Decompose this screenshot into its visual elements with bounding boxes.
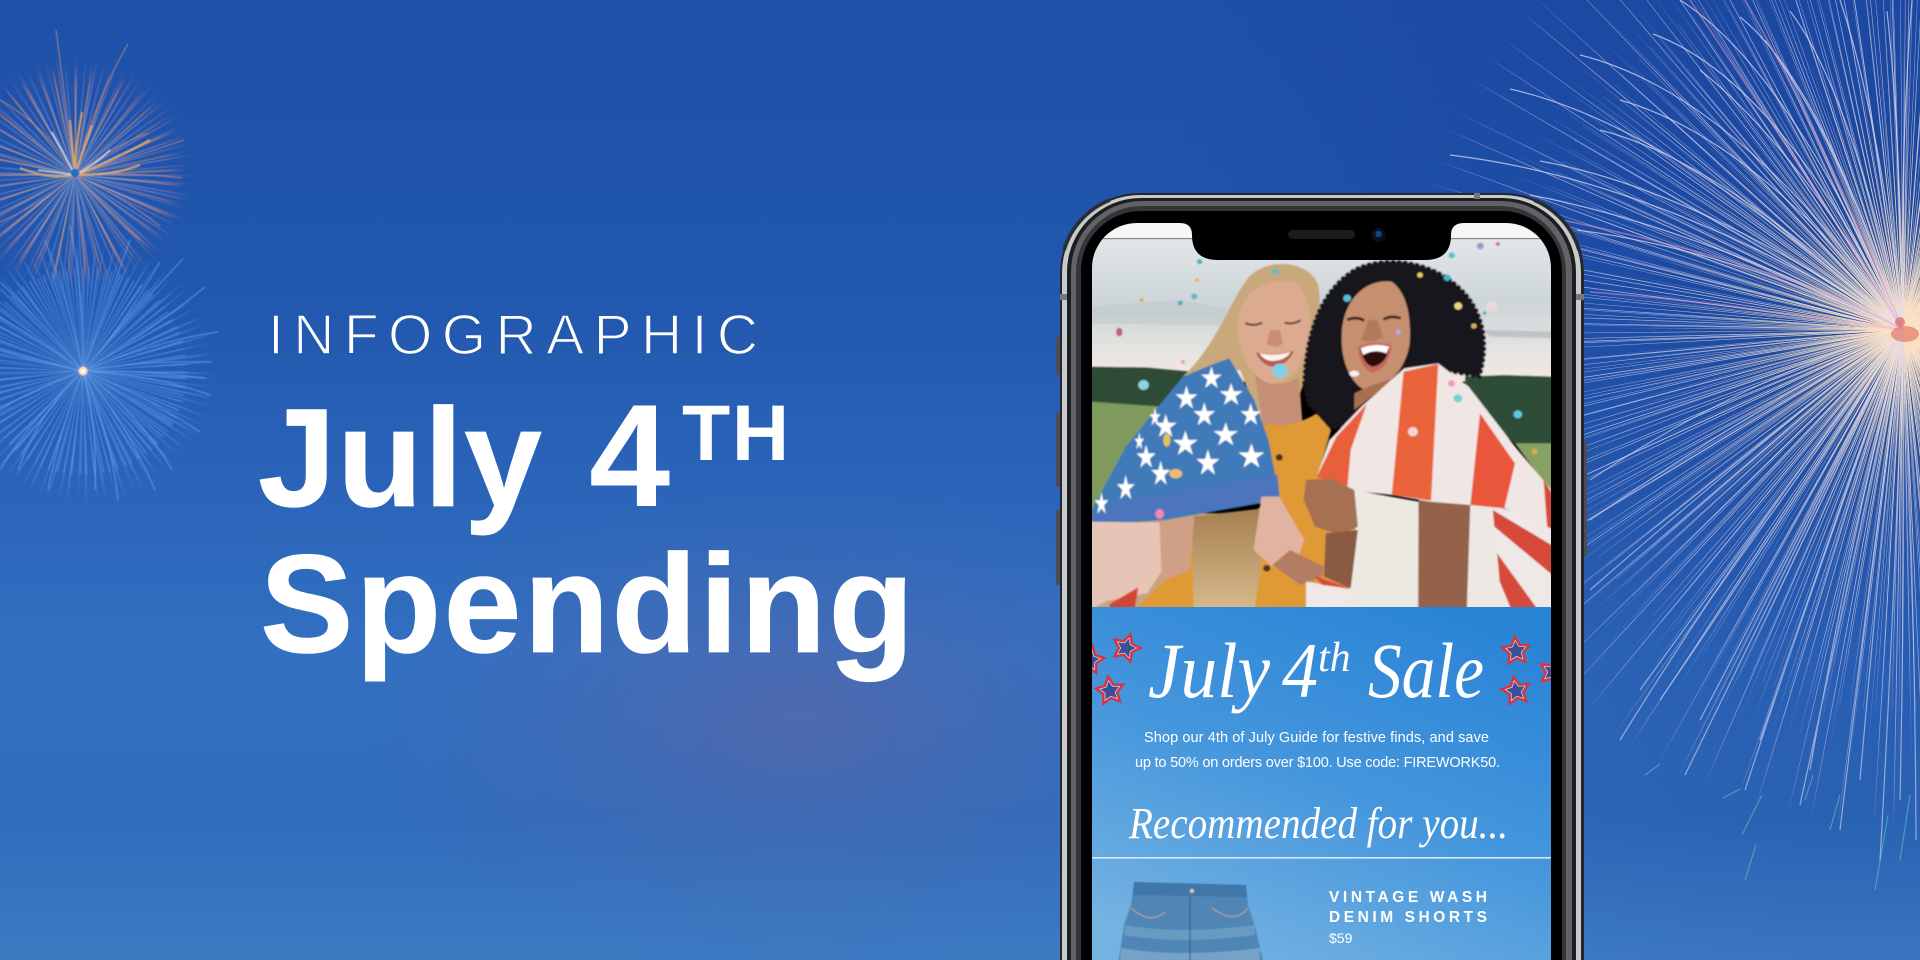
headline: July 4th Sale: July [1148, 627, 1270, 714]
product details: DENIM SHORTS [1329, 909, 1487, 926]
red and white flag with white top [1317, 363, 1554, 610]
white band above photo [1092, 223, 1551, 238]
title: July 4th Spending: Spending [260, 525, 914, 682]
photo: two women wrapped in American flags [1083, 238, 1554, 610]
blue flag with stars [1090, 358, 1280, 525]
woman with dark curly hair [1304, 262, 1484, 428]
headline: July 4th Sale: th [1318, 635, 1351, 681]
firework: large white and violet burst, right [1450, 0, 1920, 890]
background trees and field [1090, 367, 1554, 527]
promo text: up to 50% on orders over $100. Use code: FIREWORK50. [1135, 755, 1500, 771]
title: July 4th Spending: July [258, 379, 542, 536]
side buttons [1056, 337, 1587, 585]
title: July 4th Spending: 4 [589, 374, 670, 537]
heading: INFOGRAPHIC: INFOGRAPHIC [268, 303, 758, 367]
woman with blond hair [1183, 264, 1320, 428]
email body panel [1072, 607, 1573, 960]
product details [1329, 889, 1487, 946]
title: July 4th Spending [258, 374, 914, 682]
confetti [1116, 242, 1537, 519]
firework: blue burst, left [0, 225, 218, 500]
firework: orange and lavender burst, top left [0, 30, 184, 245]
product: denim shorts [1118, 882, 1264, 960]
product details: VINTAGE WASH [1329, 889, 1487, 906]
promo text: Shop our 4th of July Guide for festive finds, and save [1144, 730, 1489, 746]
hands and arms [1088, 478, 1358, 610]
product details: $59 [1329, 930, 1353, 946]
phone body rim [1060, 193, 1584, 960]
title: July 4th Spending: TH [682, 388, 789, 477]
phone screen [1072, 223, 1573, 960]
headline: July 4th Sale: Sale [1368, 627, 1484, 714]
headline: July 4th Sale [1149, 642, 1482, 714]
decorative stars [1092, 632, 1551, 706]
notch [1180, 215, 1464, 260]
divider [1092, 857, 1551, 859]
phone mockup [1056, 193, 1587, 960]
promo text [1135, 730, 1500, 771]
section heading: Recommended for you... [1128, 799, 1508, 848]
orange dress [1135, 413, 1354, 610]
headline: July 4th Sale: 4 [1282, 627, 1318, 714]
